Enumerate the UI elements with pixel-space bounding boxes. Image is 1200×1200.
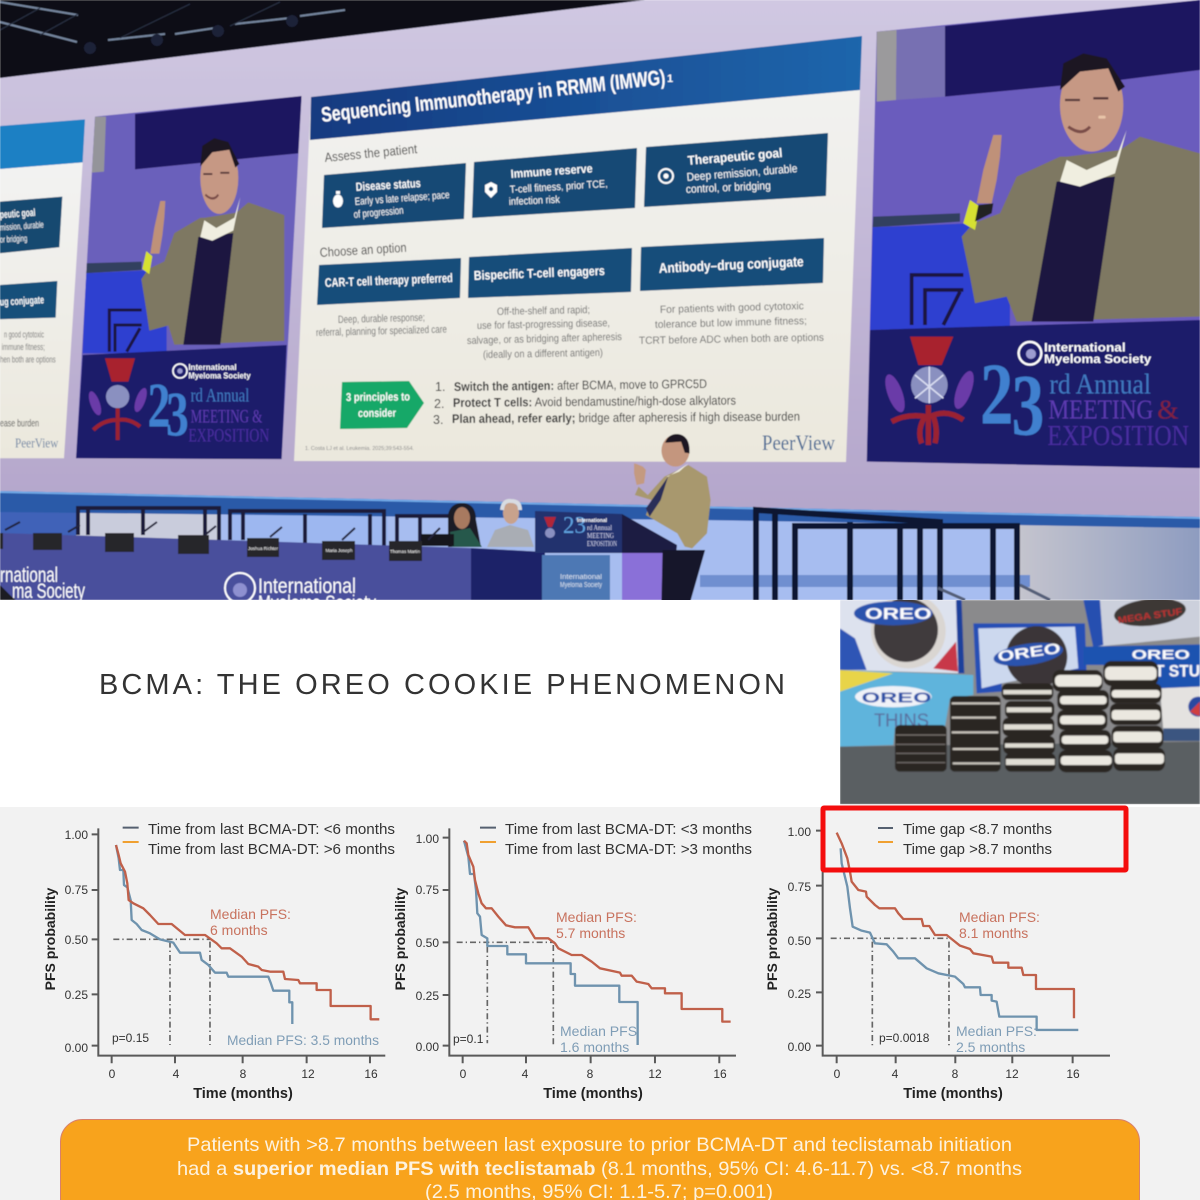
chart 2: PFS by time from last BCMA-DT, 3 months: 0 <box>460 1067 467 1081</box>
chart 1: PFS by time from last BCMA-DT, 6 months: 6 months <box>210 922 268 938</box>
left speaker video panel: International <box>188 362 237 372</box>
chart 1: PFS by time from last BCMA-DT, 6 months: 0.50 <box>65 933 88 947</box>
chart 1: PFS by time from last BCMA-DT, 6 months: 4 <box>173 1067 180 1081</box>
chart 2: PFS by time from last BCMA-DT, 3 months: Median PFS: <box>556 909 637 925</box>
chart 2: PFS by time from last BCMA-DT, 3 months: Time (months) <box>543 1086 643 1102</box>
chart 2: PFS by time from last BCMA-DT, 3 months: Time from last BCMA-DT: >3 months <box>505 842 752 858</box>
panel: presenter table with name placards: International <box>258 575 356 598</box>
panel: conference stage photo <box>0 0 1200 615</box>
package: Double Stuf bag: OREO <box>1132 648 1190 662</box>
chart 2: PFS by time from last BCMA-DT, 3 months: 0.50 <box>416 936 439 950</box>
chart 1: PFS by time from last BCMA-DT, 6 months: Time (months) <box>193 1086 293 1102</box>
chart 3: PFS by time gap, 8.7 months: 16 <box>1066 1067 1080 1081</box>
chart 1: PFS by time from last BCMA-DT, 6 months: Time from last BCMA-DT: >6 months <box>148 842 395 858</box>
chart 2: PFS by time from last BCMA-DT, 3 months: 0.00 <box>416 1040 439 1054</box>
chart 3: PFS by time gap, 8.7 months: 1.00 <box>788 825 811 839</box>
counter top <box>840 742 1200 804</box>
right speaker video panel: 3 <box>1012 356 1044 454</box>
arrow: 3 principles to consider: consider <box>358 408 396 420</box>
package: Double Stuf bag <box>1083 644 1200 741</box>
package: Oreo Thins bag: OREO <box>862 690 932 706</box>
chart 1: PFS by time from last BCMA-DT, 6 months: PFS probability <box>42 887 58 990</box>
cookie stack 3: double <box>1002 683 1056 772</box>
chart 2: PFS by time from last BCMA-DT, 3 months: 0.25 <box>416 989 439 1003</box>
package: center Oreo bag <box>973 623 1087 693</box>
chart 3: PFS by time gap, 8.7 months: 0.25 <box>788 987 811 1001</box>
panel: presenter table with name placards: rnational <box>0 564 58 587</box>
podium: rd Annual <box>587 524 612 532</box>
option: ADC: Antibody–drug conjugate <box>658 253 804 276</box>
chart 3: PFS by time gap, 8.7 months: 0.00 <box>788 1040 811 1054</box>
chart 2: PFS by time from last BCMA-DT, 3 months: Median PFS <box>560 1023 637 1039</box>
podium: International <box>560 574 602 581</box>
right speaker video panel: International <box>1044 341 1126 355</box>
left speaker video panel: 2 <box>148 371 170 441</box>
panel: presenter table with name placards: ma Society <box>12 580 85 603</box>
option: bispecific <box>468 248 632 298</box>
left slide fragment: hen both are options <box>0 354 56 364</box>
chart 1: PFS by time from last BCMA-DT, 6 months: 0 <box>109 1067 116 1081</box>
chart 1: PFS by time from last BCMA-DT, 6 months: p=0.15 <box>112 1031 149 1045</box>
chart 3: PFS by time gap, 8.7 months: 0 <box>834 1067 841 1081</box>
chart 1: PFS by time from last BCMA-DT, 6 months: 8 <box>240 1067 247 1081</box>
podium <box>535 511 677 600</box>
card: immune reserve: Immune reserve <box>510 161 593 181</box>
text: ADC description <box>639 300 824 347</box>
chart 2: PFS by time from last BCMA-DT, 3 months: 16 <box>713 1067 727 1081</box>
card: therapeutic goal: Deep remission, durable <box>686 163 798 184</box>
package: Mega Stuf bag <box>1083 595 1200 648</box>
chart 3: PFS by time gap, 8.7 months: Median PFS: <box>956 1023 1037 1039</box>
slide title: Sequencing Immunotherapy in RRMM (IMWG) <box>320 66 666 127</box>
right speaker video panel: & <box>1157 395 1179 425</box>
right speaker video panel <box>860 0 1200 470</box>
text: bispecific description <box>467 304 622 361</box>
chart 3: PFS by time gap, 8.7 months <box>764 808 1126 1102</box>
legend with red highlight box: Time gap <8.7 months <box>903 822 1052 838</box>
left slide fragment: or bridging <box>0 233 27 245</box>
card: immune reserve <box>472 148 637 218</box>
legend with red highlight box <box>823 808 1126 870</box>
chart 1: PFS by time from last BCMA-DT, 6 months: 0.25 <box>65 988 88 1002</box>
chart 2: PFS by time from last BCMA-DT, 3 months: 4 <box>522 1067 529 1081</box>
callout: orange conclusion box: Patients with >8.7 months between last exposure to prior BCMA-DT and teclistamab initiation <box>187 1134 1012 1156</box>
text: CAR-T description <box>316 314 447 338</box>
chart 3: PFS by time gap, 8.7 months: 8.1 months <box>959 925 1028 941</box>
package: top-left Oreo bag: OREO <box>865 606 932 623</box>
right speaker video panel: MEETING <box>1048 395 1153 425</box>
chart 2: PFS by time from last BCMA-DT, 3 months: PFS probability <box>392 887 408 990</box>
chart 2: PFS by time from last BCMA-DT, 3 months: 1.6 months <box>560 1039 629 1055</box>
chart 3: PFS by time gap, 8.7 months: 12 <box>1005 1067 1019 1081</box>
podium: EXPOSITION <box>587 540 617 548</box>
chart 1: PFS by time from last BCMA-DT, 6 months: 16 <box>364 1067 378 1081</box>
cookie stack 4: mega <box>1053 670 1113 772</box>
package: Mega Stuf bag: MEGA STUF <box>1117 606 1183 625</box>
chart 2: PFS by time from last BCMA-DT, 3 months: 5.7 months <box>556 925 625 941</box>
list: three principles: Switch the antigen: after BCMA, move to GPRC5D <box>454 377 707 394</box>
left speaker video panel: rd Annual <box>191 386 249 407</box>
left speaker video panel: EXPOSITION <box>188 426 269 447</box>
chart 2: PFS by time from last BCMA-DT, 3 months: 12 <box>648 1067 662 1081</box>
text: CAR-T description: Deep, durable response; <box>338 312 425 326</box>
heading: BCMA Oreo cookie phenomenon: BCMA: THE OREO COOKIE PHENOMENON <box>99 669 787 701</box>
chart 2: PFS by time from last BCMA-DT, 3 months: 0.75 <box>416 883 439 897</box>
list: three principles: 3. <box>433 413 443 427</box>
panel: main slide Sequencing Immunotherapy: 1 <box>667 73 673 85</box>
presenter at podium <box>634 434 711 602</box>
left slide fragment: mission, durable <box>0 220 44 233</box>
text: bispecific description: (ideally on a different antigen) <box>483 347 603 361</box>
chart 1: PFS by time from last BCMA-DT, 6 months <box>42 822 395 1102</box>
chart 1: PFS by time from last BCMA-DT, 6 months: Median PFS: <box>210 906 291 922</box>
package: top-left Oreo bag <box>840 594 964 673</box>
option: ADC <box>640 238 824 291</box>
podium: Myeloma Society <box>560 582 602 589</box>
text: CAR-T description: referral, planning for specialized care <box>316 324 447 339</box>
chart 3: PFS by time gap, 8.7 months: 4 <box>892 1067 899 1081</box>
card: therapeutic goal: control, or bridging <box>686 180 771 196</box>
cookie stack 5: most stuffed <box>1103 661 1165 771</box>
left speaker video panel: 3 <box>166 379 189 449</box>
ceiling lighting truss <box>0 0 645 78</box>
lavender stage screen wall <box>0 0 1200 517</box>
slide header band <box>310 36 862 140</box>
card: disease status: Disease status <box>355 176 421 194</box>
left speaker video panel <box>73 93 307 463</box>
chart 3: PFS by time gap, 8.7 months: PFS probability <box>764 887 780 990</box>
right speaker video panel: 2 <box>980 345 1013 443</box>
chart 1: PFS by time from last BCMA-DT, 6 months: 1.00 <box>65 828 88 842</box>
chart 1: PFS by time from last BCMA-DT, 6 months: Median PFS: 3.5 months <box>227 1032 379 1048</box>
callout: orange conclusion box: had a superior median PFS with teclistamab (8.1 months, 95% CI: 4.6-11.7) vs. <8.7 months <box>177 1158 1022 1180</box>
chart 3: PFS by time gap, 8.7 months: p=0.0018 <box>879 1031 930 1045</box>
footnote: 1. Costa LJ et al. Leukemia. 2025;39:543-554. <box>305 446 414 452</box>
left slide fragment: ug conjugate <box>0 294 44 309</box>
option: bispecific: Bispecific T-cell engagers <box>474 263 605 283</box>
chart 3: PFS by time gap, 8.7 months: Time (months) <box>903 1086 1003 1102</box>
text: bispecific description: Off-the-shelf and rapid; <box>497 304 590 318</box>
panel: Kaplan-Meier charts background <box>0 807 1200 1200</box>
chart 3: PFS by time gap, 8.7 months: 0.50 <box>788 934 811 948</box>
text: ADC description: For patients with good cytotoxic <box>660 300 804 316</box>
card: immune reserve: T-cell fitness, prior TCE, <box>509 178 608 196</box>
panel: presenter table with name placards <box>0 520 546 600</box>
left slide fragment: immune fitness; <box>2 342 45 352</box>
panel: presenter table with name placards: Thomas Martin <box>390 549 420 554</box>
panel: presenter table with name placards: Joshua Richter <box>248 546 279 551</box>
card: disease status: Early vs late relapse; pace <box>354 189 450 208</box>
chart 2: PFS by time from last BCMA-DT, 3 months: 1.00 <box>416 832 439 846</box>
card: therapeutic goal: Therapeutic goal <box>687 145 783 168</box>
text: ADC description: TCRT before ADC when both are options <box>639 332 824 347</box>
option: CAR-T: CAR-T cell therapy preferred <box>325 271 453 290</box>
cookie stack 1: thin <box>895 725 947 772</box>
card: therapeutic goal <box>644 133 828 207</box>
text: bispecific description: use for fast-progressing disease, <box>477 317 610 332</box>
chart 2: PFS by time from last BCMA-DT, 3 months: p=0.1 <box>453 1032 484 1046</box>
left speaker video panel: Myeloma Society <box>188 370 251 380</box>
list: three principles: Protect T cells: Avoid bendamustine/high-dose alkylators <box>453 394 736 410</box>
panel: presenter table with name placards: Myeloma Society <box>258 592 376 615</box>
list: three principles <box>433 377 800 427</box>
package: Oreo Thins bag: THINS <box>874 710 929 731</box>
left slide fragment: peutic goal <box>0 207 36 221</box>
card: disease status <box>322 163 466 228</box>
right speaker video panel: Myeloma Society <box>1044 352 1151 366</box>
package: Oreo Thins bag <box>840 670 973 747</box>
left slide fragment <box>0 119 85 458</box>
legend with red highlight box: Time gap >8.7 months <box>903 842 1052 858</box>
callout: orange conclusion box <box>60 1120 1140 1200</box>
chart 3: PFS by time gap, 8.7 months: 0.75 <box>788 880 811 894</box>
chart 3: PFS by time gap, 8.7 months: 8 <box>952 1067 959 1081</box>
chart 1: PFS by time from last BCMA-DT, 6 months: 12 <box>301 1067 315 1081</box>
card: disease status: of progression <box>353 205 404 221</box>
arrow: 3 principles to consider <box>340 381 424 429</box>
list: three principles: Plan ahead, refer early; bridge after apheresis if high disease burden <box>452 410 800 426</box>
option: CAR-T <box>317 258 461 305</box>
list: three principles: 1. <box>435 380 445 394</box>
left slide fragment: PeerView <box>15 436 59 451</box>
chart 2: PFS by time from last BCMA-DT, 3 months: Time from last BCMA-DT: <3 months <box>505 822 752 838</box>
white title section background <box>0 600 841 807</box>
left speaker video panel: MEETING & <box>191 407 262 428</box>
panel: presenter table with name placards: Maria Joseph <box>325 548 353 553</box>
text: ADC description: tolerance but low immune fitness; <box>655 315 807 331</box>
chart 1: PFS by time from last BCMA-DT, 6 months: 0.00 <box>65 1041 88 1055</box>
left slide fragment: n good cytotoxic <box>4 329 44 339</box>
chart 2: PFS by time from last BCMA-DT, 3 months: 8 <box>587 1067 594 1081</box>
card: immune reserve: infection risk <box>509 194 561 208</box>
panel: main slide Sequencing Immunotherapy <box>294 36 862 462</box>
image: Oreo packages and cookie stacks <box>840 594 1200 804</box>
chart 2: PFS by time from last BCMA-DT, 3 months <box>392 822 752 1102</box>
heading: choose an option: Choose an option <box>319 240 407 260</box>
podium: MEETING <box>587 532 614 540</box>
podium: 23 <box>563 513 586 539</box>
right speaker video panel: rd Annual <box>1049 369 1151 400</box>
left slide fragment: ease burden <box>0 419 39 430</box>
chart 3: PFS by time gap, 8.7 months: 2.5 months <box>956 1039 1025 1055</box>
text: bispecific description: salvage, or as bridging after apheresis <box>467 331 622 347</box>
cookie stack 2: regular <box>950 696 1001 772</box>
list: three principles: 2. <box>434 397 444 411</box>
arrow: 3 principles to consider: 3 principles to <box>346 391 410 404</box>
panelists at table <box>421 501 534 547</box>
chart 1: PFS by time from last BCMA-DT, 6 months: Time from last BCMA-DT: <6 months <box>148 822 395 838</box>
logo: PeerView: PeerView <box>762 430 835 455</box>
podium: International <box>577 518 608 524</box>
chart 1: PFS by time from last BCMA-DT, 6 months: 0.75 <box>65 883 88 897</box>
chart 3: PFS by time gap, 8.7 months: Median PFS: <box>959 909 1040 925</box>
package: center Oreo bag: OREO <box>997 641 1062 666</box>
panel: stage set, windows and frames <box>0 491 1200 600</box>
heading: assess the patient: Assess the patient <box>324 141 418 165</box>
